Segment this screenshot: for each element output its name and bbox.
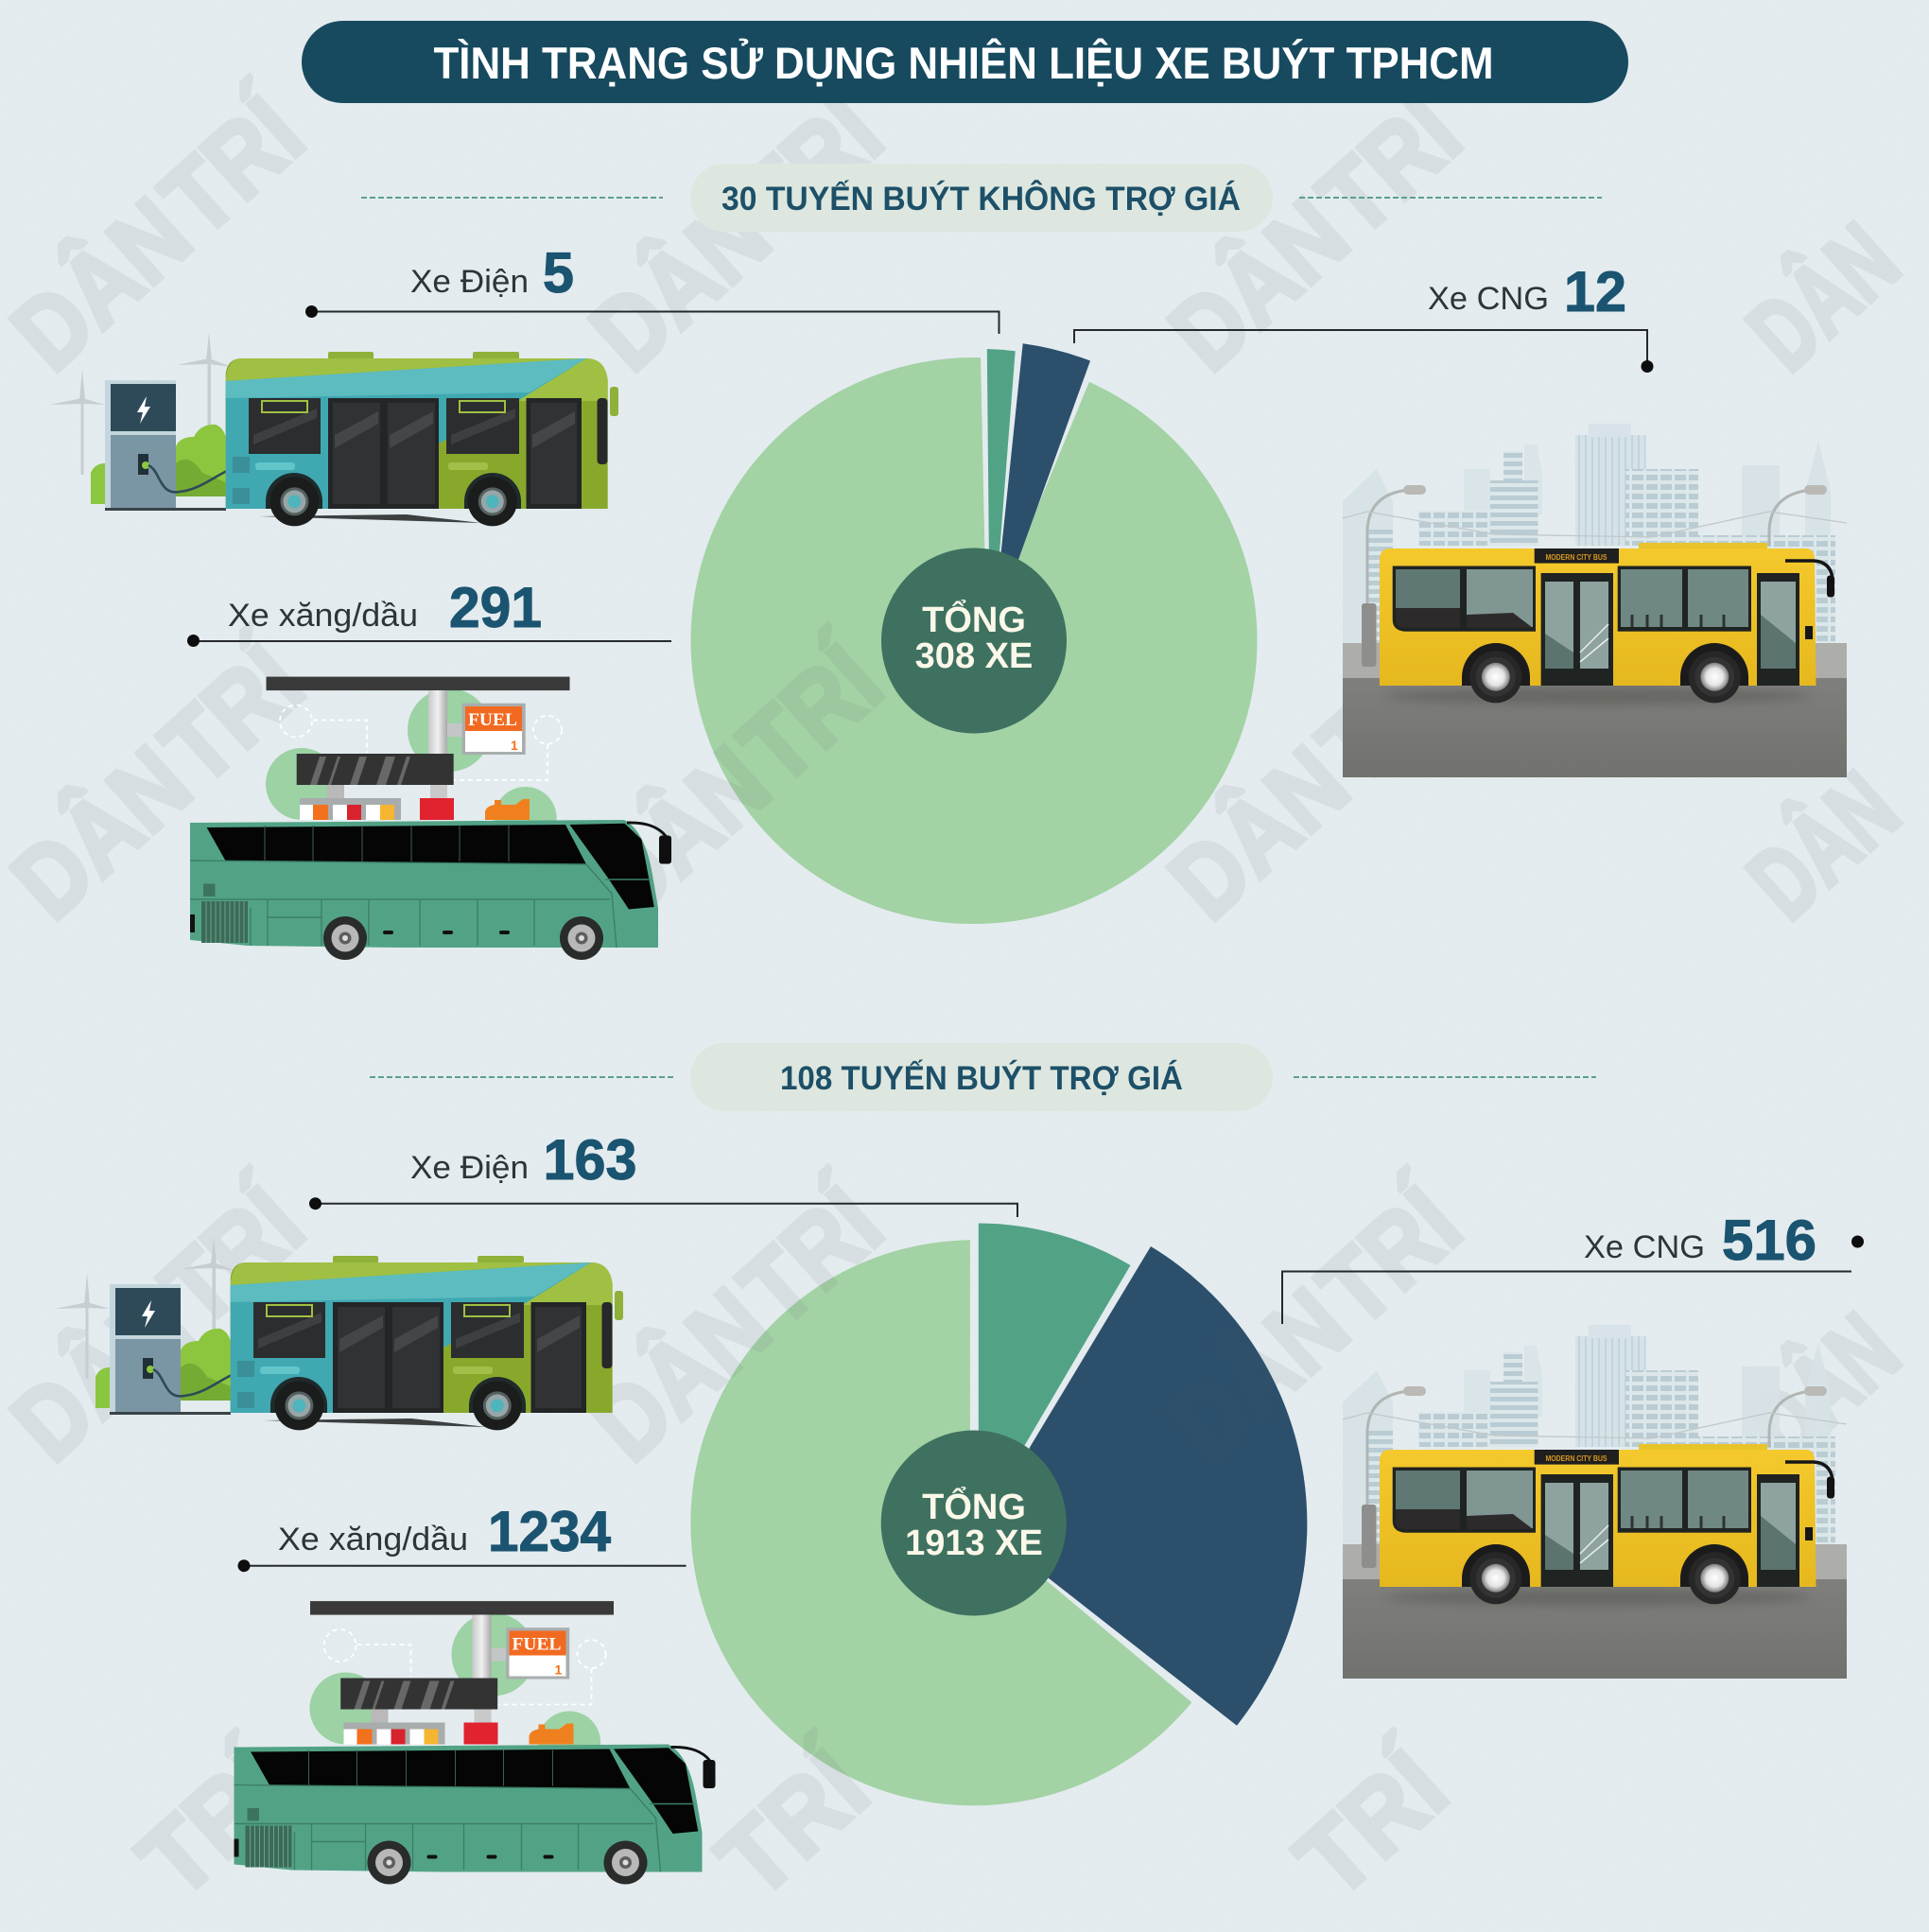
slice: electric 163	[979, 1224, 1131, 1475]
slice: CNG 12	[999, 343, 1090, 567]
watermark: DÂN TRÍ	[569, 74, 905, 392]
slice: CNG 516	[1002, 1246, 1307, 1726]
watermark: TRÍ	[696, 1728, 892, 1920]
total: 308: 308 XE	[915, 636, 1033, 676]
label: electric 163	[309, 1128, 1017, 1217]
watermark: DÂN TRÍ	[0, 622, 326, 941]
illustration: petrol bus at fuel station (subsidised): 1	[554, 1662, 562, 1678]
slice: petrol/diesel 291	[691, 357, 1258, 924]
illustration: CNG city bus (subsidised): MODERN CITY BUS	[1545, 1454, 1608, 1463]
watermark: DÂN TRÍ	[569, 622, 905, 941]
label: petrol 1234: Xe xăng/dầu	[278, 1522, 468, 1558]
watermark: DÂN TRÍ	[1148, 1164, 1484, 1483]
illustration: CNG city bus	[1343, 424, 1847, 777]
label: CNG 12: Xe CNG	[1428, 281, 1549, 317]
section heading: 108 routes	[370, 1043, 1596, 1111]
label: electric 163: Xe Điện	[410, 1150, 529, 1186]
label: CNG 516	[1282, 1209, 1864, 1324]
chart: 108 routes fuel pie	[690, 1224, 1307, 1805]
section heading: 30 routes: 30 TUYẾN BUÝT KHÔNG TRỢ GIÁ	[721, 180, 1241, 218]
total: 1913	[881, 1430, 1067, 1615]
label: CNG 12	[1074, 260, 1653, 373]
total: 308: TỔNG	[922, 598, 1026, 640]
title: TÌNH TRẠNG SỬ DỤNG NHIÊN LIỆU XE BUÝT TPHCM	[433, 38, 1494, 88]
watermark: DÂN TRÍ	[0, 74, 326, 392]
illustration: petrol bus at fuel station: 1	[511, 738, 518, 753]
watermark: TRÍ	[117, 1728, 313, 1920]
label: petrol 1234: 1234	[488, 1500, 612, 1563]
chart: 30 routes fuel pie	[691, 343, 1258, 924]
label: electric 163: 163	[543, 1128, 637, 1192]
watermark: TRÍ	[1275, 1728, 1470, 1920]
label: electric 5: Xe Điện	[410, 264, 529, 300]
total: 1913: 1913 XE	[905, 1523, 1043, 1563]
label: CNG 516: Xe CNG	[1584, 1229, 1705, 1265]
watermark: DÂN TRÍ	[569, 1164, 905, 1483]
label: CNG 516: 516	[1722, 1209, 1816, 1272]
illustration: petrol bus at fuel station (subsidised): FUEL	[513, 1634, 562, 1655]
label: petrol 291: Xe xăng/dầu	[228, 598, 418, 634]
total: 308	[881, 548, 1067, 734]
watermark: DÂN TRÍ	[0, 1164, 326, 1483]
illustration: CNG city bus (subsidised)	[1343, 1325, 1847, 1679]
illustration: petrol bus at fuel station (subsidised)	[235, 1601, 715, 1884]
label: CNG 12: 12	[1564, 260, 1626, 323]
watermark: DÂN TRÍ	[1148, 622, 1484, 941]
total: 1913: TỔNG	[922, 1485, 1026, 1527]
slice: electric 5	[987, 349, 1016, 567]
watermark: DÂN TRÍ	[1148, 74, 1484, 392]
label: petrol 291	[187, 576, 671, 647]
illustration: petrol bus at fuel station: FUEL	[468, 710, 517, 730]
label: petrol 1234	[238, 1500, 686, 1572]
section heading: 30 routes	[361, 164, 1602, 232]
label: electric 5	[305, 241, 999, 334]
illustration: petrol bus at fuel station	[190, 677, 671, 960]
title	[302, 21, 1628, 103]
illustration: electric bus (subsidised)	[55, 1236, 623, 1430]
label: petrol 291: 291	[449, 576, 542, 639]
slice: petrol/diesel 1234	[690, 1240, 1191, 1805]
illustration: CNG city bus: MODERN CITY BUS	[1545, 553, 1608, 562]
label: electric 5: 5	[543, 241, 574, 305]
section heading: 108 routes: 108 TUYẾN BUÝT TRỢ GIÁ	[780, 1059, 1183, 1097]
illustration: electric bus	[50, 332, 618, 526]
